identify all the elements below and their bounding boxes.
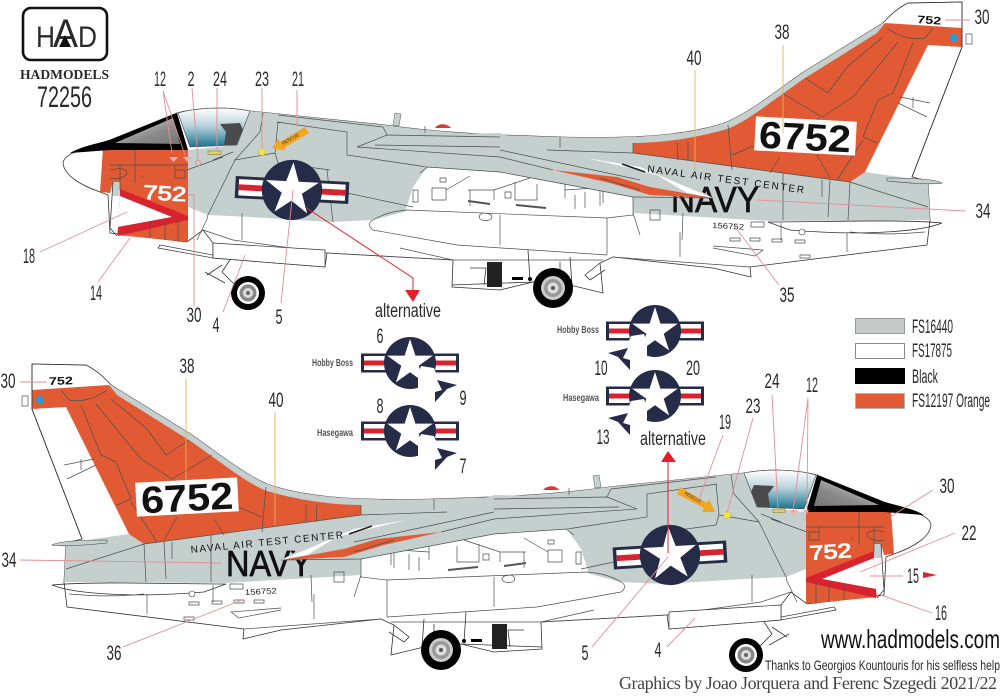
callout 30 nose bottom [890,475,954,517]
callout 30 tail: 30 [974,6,990,29]
callout 24: 24 [213,68,227,91]
marking: yellow dot top [258,148,266,156]
icon: rescue arrow top: RESCUE [281,132,300,146]
marking: canopy stencil bottom [773,509,785,512]
callout 24 bottom: 24 [764,370,780,393]
part numbers for alternative roundels: 8 [376,395,384,418]
roundel: bottom [611,521,729,589]
roundel: top [234,157,350,223]
callout 5: 5 [276,306,282,329]
callout 12 bottom [793,374,818,513]
marking: serial box bottom: 6752 [140,476,234,522]
legend item: Black: Black [912,367,938,388]
marking: serial box top: 6752 [758,115,852,161]
callout 36 [106,600,242,665]
callout 30 nose bottom: 30 [940,475,954,498]
callout 23 bottom [727,395,760,513]
callout 16 [878,594,947,625]
roundel alternative: Hasegawa right: Hasegawa [563,393,599,404]
callout 36: 36 [106,642,122,665]
callouts: bottom aircraft [0,355,976,665]
part numbers for alternative roundels [376,325,700,478]
callout 24 [213,68,227,150]
callout 24 bottom [764,370,780,510]
callout 14 [90,238,130,305]
callout 5 bottom: 5 [582,642,588,665]
callout 40 [686,47,702,170]
wing: bottom [281,495,637,560]
callout 14: 14 [90,282,102,305]
logo: HAD frame: H [36,21,55,54]
callout 2 [188,68,198,160]
callout 30 [186,195,202,327]
legend: colours [855,317,990,412]
callout 21: 21 [292,68,304,91]
callout 38 [774,21,790,133]
callout 18: 18 [23,245,35,268]
callout 35 [735,227,794,307]
callout 18 [23,212,127,268]
callout 4 [212,255,245,337]
legend item: FS16440: FS16440 [912,317,953,338]
callout 38: 38 [774,21,790,44]
callout 19: 19 [719,411,731,434]
callout 30 tail bottom [0,370,47,393]
callout 15 [870,565,937,588]
aircraft: bottom profile [22,364,931,672]
callout 34 [758,200,991,223]
marking: pink triangles top [169,157,192,162]
roundel alternative: Hasegawa left: Hasegawa [317,428,353,439]
icon: rescue arrow bottom: RESCUE [684,491,702,504]
callout 34 bottom: 34 [2,549,17,572]
callout 22: 22 [962,522,976,545]
roundel alternative: Hobby Boss left [312,337,459,402]
callout 15: 15 [907,565,919,588]
marking: yellow dot bottom [723,511,731,519]
logo: HAD frame [23,8,107,60]
callout 4 bottom: 4 [654,639,662,662]
marking: NAVAL AIR TEST CENTER bottom: NAVAL AIR TEST CENTER [190,530,344,556]
marking: NAVAL AIR TEST CENTER top: NAVAL AIR TEST CENTER [647,164,805,196]
callout 40: 40 [686,47,702,70]
credit: graphics: Graphics by Joao Jorquera and Ferenc Szegedi 2021/22 [619,673,997,693]
callouts: top aircraft [23,6,991,337]
callout 23 bottom: 23 [746,395,760,418]
part numbers for alternative roundels: 20 [686,357,700,380]
callout 12: 12 [154,68,166,91]
roundel alternative: Hobby Boss right: Hobby Boss [557,325,599,336]
logo: HAD frame: A [53,12,78,56]
wing: top [357,133,713,198]
marking: nose 752 top: 752 [143,182,187,206]
roundel alternative: Hobby Boss right [557,305,704,370]
text: alternative top: alternative [375,301,441,322]
callout 23 [255,68,269,148]
callout 16: 16 [935,602,947,625]
aircraft: top profile [63,2,972,310]
product number: 72256 [37,81,92,114]
callout 5 [276,190,293,329]
callout 4: 4 [212,314,220,337]
callout 21 [292,68,304,127]
callout 40 bottom: 40 [268,389,284,412]
callout 38 bottom [180,355,194,480]
arrow: alternative bottom [661,451,676,553]
legend item: FS17875: FS17875 [912,341,952,362]
callout 2: 2 [188,68,194,91]
marking: bureau number bottom: 156752 [245,586,278,597]
marking: pink triangles bottom [789,510,809,516]
marking: fin 752 top: 752 [917,14,942,28]
callout 22 [860,522,976,572]
callout 30 tail [945,6,990,29]
brand name: HADMODELS [20,68,109,83]
callout 35: 35 [780,284,794,307]
part numbers for alternative roundels: 10 [594,357,608,380]
callout 5 bottom [582,557,668,665]
marking: pink circle top [195,160,201,166]
marking: bureau number top: 156752 [712,221,745,232]
part numbers for alternative roundels: 9 [460,387,466,410]
logo: HAD frame: D [78,21,97,54]
marking: NAVY top: NAVY [671,179,759,220]
callout 19 [698,411,731,502]
callout 4 bottom [654,618,695,662]
marking: nose 752 bottom: 752 [809,540,852,565]
callout 30: 30 [186,304,202,327]
callout 12 bottom: 12 [806,374,818,397]
callout 30 tail bottom: 30 [0,370,16,393]
roundel alternative: Hasegawa right [563,370,704,435]
arrow: alternative top [305,207,420,302]
callout 40 bottom [268,389,284,525]
roundel alternative: Hobby Boss left: Hobby Boss [312,358,353,369]
part numbers for alternative roundels: 6 [376,325,384,348]
marking: fin 752 bottom: 752 [49,375,73,388]
callout 34 bottom [2,549,222,572]
text: alternative bottom: alternative [640,429,706,450]
callout 12 [154,68,185,155]
part numbers for alternative roundels: 13 [596,426,610,449]
marking: canopy stencil top [208,151,221,154]
callout 23: 23 [255,68,269,91]
part numbers for alternative roundels: 7 [460,455,466,478]
icon: rescue arrow bottom [677,487,715,512]
callout 38 bottom: 38 [180,355,194,378]
marking: NAVY bottom: NAVY [226,543,312,584]
roundel alternative: Hasegawa left [317,405,459,470]
icon: rescue arrow top [272,127,309,151]
callout 34: 34 [976,200,991,223]
